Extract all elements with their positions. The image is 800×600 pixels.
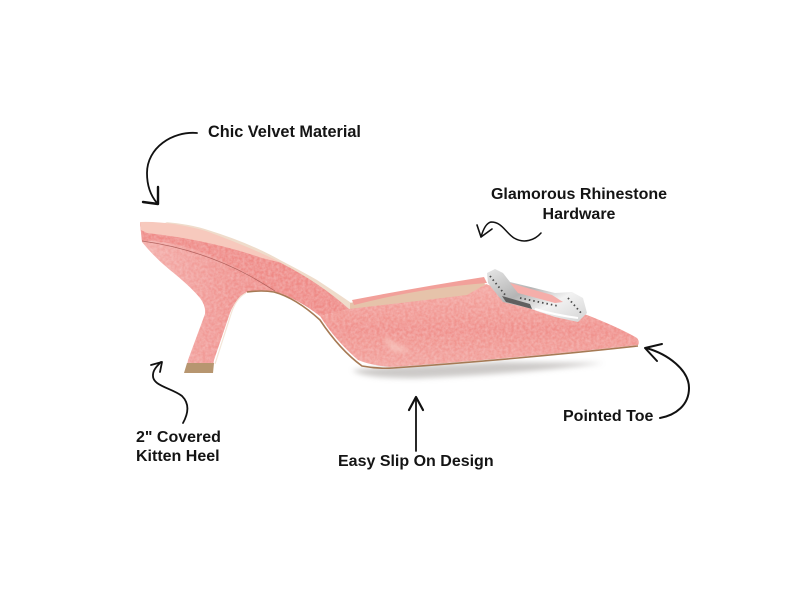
- arrow: toe: [645, 344, 689, 418]
- vamp: [320, 284, 639, 367]
- label: rhinestone hardware: Glamorous Rhinestone: [491, 186, 667, 203]
- label: kitten heel: [136, 429, 221, 465]
- ground shadow: [352, 362, 604, 378]
- heel counter and heel: [140, 223, 347, 366]
- label: kitten heel: Kitten Heel: [136, 448, 220, 465]
- label: pointed toe: Pointed Toe: [563, 408, 653, 425]
- label: chic velvet material: Chic Velvet Material: [208, 123, 361, 141]
- insole: [165, 222, 357, 316]
- collar seam: [142, 241, 275, 291]
- arrow: heel: [151, 362, 187, 423]
- arrow: hardware: [477, 222, 541, 241]
- arch and sole edge: [247, 291, 638, 368]
- label: rhinestone hardware: Hardware: [543, 206, 616, 223]
- collar band: [140, 223, 349, 316]
- collar highlight: [140, 222, 282, 263]
- icon: rhinestone buckle: [487, 269, 587, 322]
- label: rhinestone hardware: [491, 186, 667, 223]
- label: kitten heel: 2" Covered: [136, 429, 221, 446]
- vamp sheen: [382, 336, 412, 352]
- heel tip: [184, 363, 214, 373]
- arrow: slip on: [409, 397, 423, 451]
- arrow: velvet: [143, 133, 197, 204]
- front rim: [352, 277, 487, 305]
- shoe: [140, 222, 639, 373]
- label: easy slip on design: Easy Slip On Design: [338, 453, 494, 470]
